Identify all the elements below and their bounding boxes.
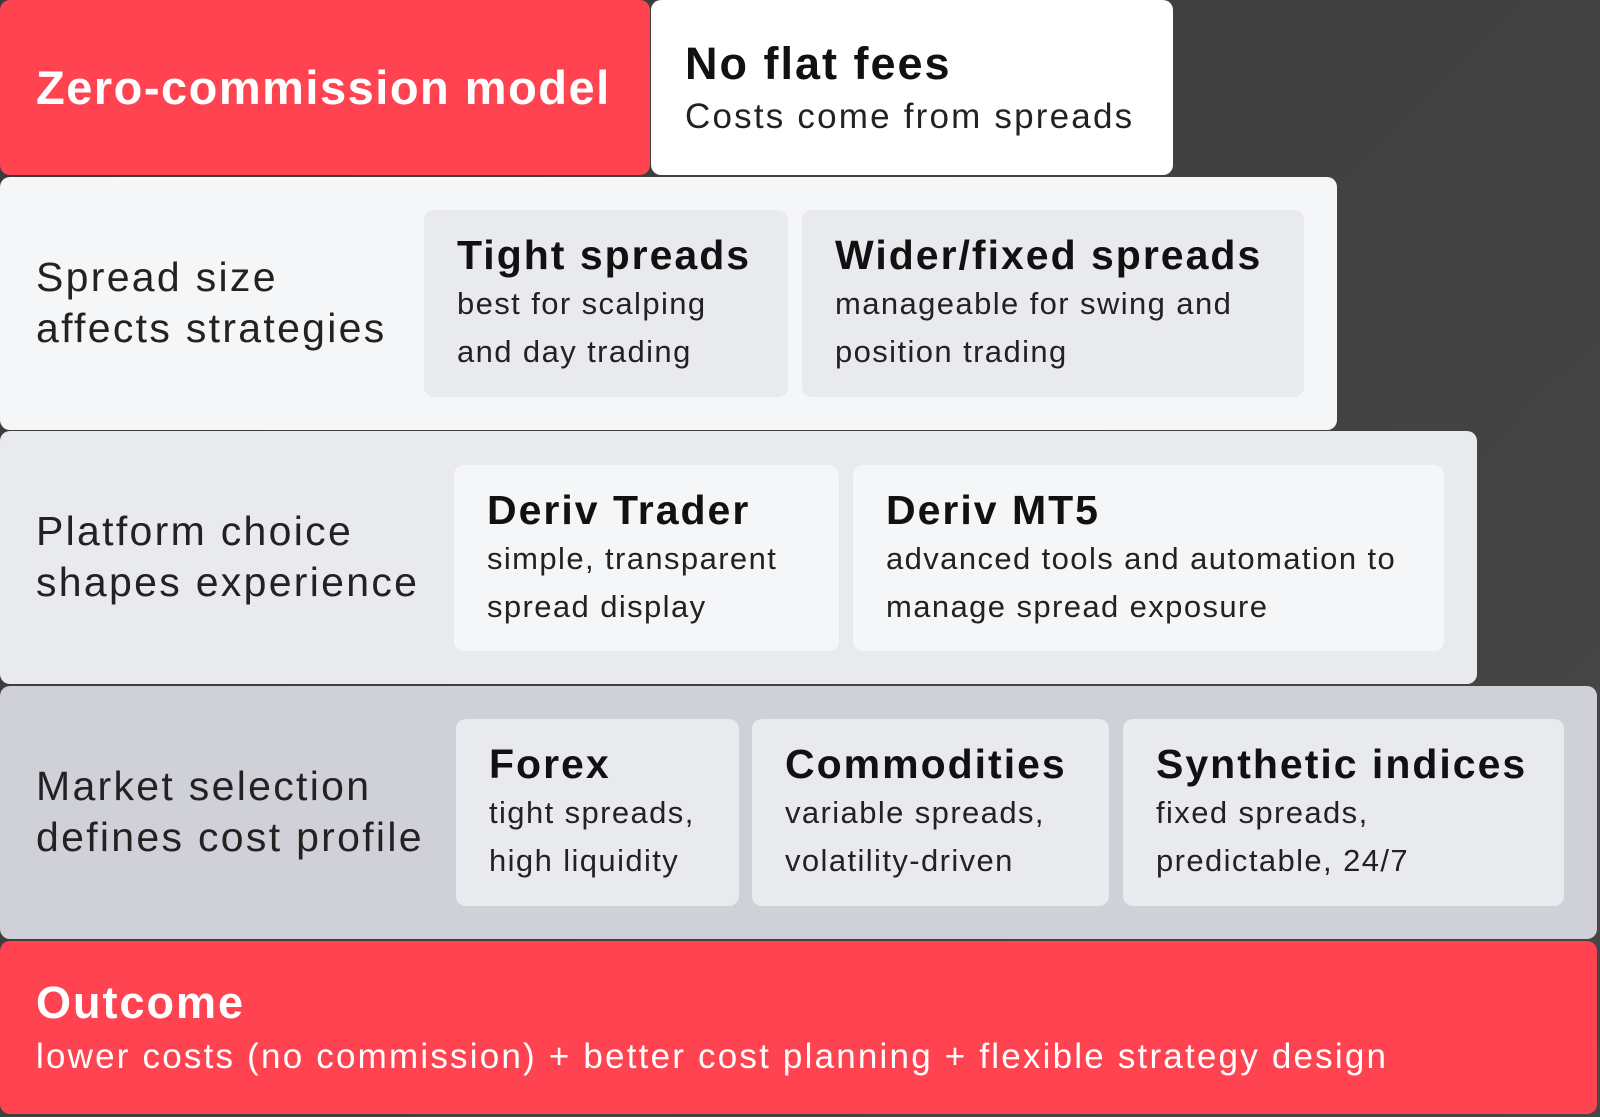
- card: deriv mt5: [853, 465, 1444, 651]
- card: deriv trader: Deriv Trader: [487, 487, 750, 533]
- panel: spread size: [0, 177, 1337, 430]
- card: commodities: variable spreads,: [785, 795, 1045, 830]
- panel: market selection: [0, 686, 1597, 939]
- label: spread size: [36, 254, 387, 351]
- card: wider spreads: [802, 210, 1304, 397]
- card: deriv mt5: advanced tools and automation to: [886, 541, 1396, 576]
- label: market selection: defines cost profile: [36, 814, 424, 860]
- label: platform choice: Platform choice: [36, 508, 353, 554]
- panel: outcome: [0, 941, 1597, 1114]
- text: outcome: lower costs (no commission) + better cost planning + flexible strategy design: [36, 1037, 1388, 1076]
- label: market selection: Market selection: [36, 763, 371, 809]
- card: deriv trader: simple, transparent: [487, 541, 777, 576]
- card: deriv trader: [454, 465, 839, 651]
- card: commodities: Commodities: [785, 741, 1067, 787]
- card: commodities: [752, 719, 1109, 906]
- panel: platform choice: [0, 431, 1477, 684]
- card: tight spreads: and day trading: [457, 334, 692, 369]
- card: synthetic indices: predictable, 24/7: [1156, 843, 1409, 878]
- panel: zero-commission model: [0, 0, 650, 175]
- card: tight spreads: best for scalping: [457, 286, 707, 321]
- card: deriv mt5: manage spread exposure: [886, 589, 1268, 624]
- card: wider spreads: manageable for swing and: [835, 286, 1232, 321]
- panel: no flat fees: [651, 0, 1173, 175]
- card: tight spreads: Tight spreads: [457, 232, 751, 278]
- card: deriv mt5: Deriv MT5: [886, 487, 1100, 533]
- label: spread size: affects strategies: [36, 305, 387, 351]
- heading: outcome: Outcome: [36, 977, 245, 1028]
- card: forex: tight spreads,: [489, 795, 695, 830]
- card: synthetic indices: [1123, 719, 1564, 906]
- text: costs from spreads: Costs come from spreads: [685, 97, 1134, 136]
- card: forex: high liquidity: [489, 843, 679, 878]
- label: spread size: Spread size: [36, 254, 278, 300]
- card: forex: Forex: [489, 741, 611, 787]
- card: forex: [456, 719, 739, 906]
- card: commodities: volatility-driven: [785, 843, 1014, 878]
- card: wider spreads: Wider/fixed spreads: [835, 232, 1262, 278]
- card: wider spreads: position trading: [835, 334, 1068, 369]
- card: synthetic indices: Synthetic indices: [1156, 741, 1527, 787]
- card: deriv trader: spread display: [487, 589, 706, 624]
- card: tight spreads: [424, 210, 788, 397]
- label: platform choice: shapes experience: [36, 559, 419, 605]
- heading: no flat fees: No flat fees: [685, 38, 952, 89]
- label: platform choice: [36, 508, 419, 605]
- heading: zero-commission: Zero-commission model: [36, 61, 611, 114]
- label: market selection: [36, 763, 424, 860]
- card: synthetic indices: fixed spreads,: [1156, 795, 1369, 830]
